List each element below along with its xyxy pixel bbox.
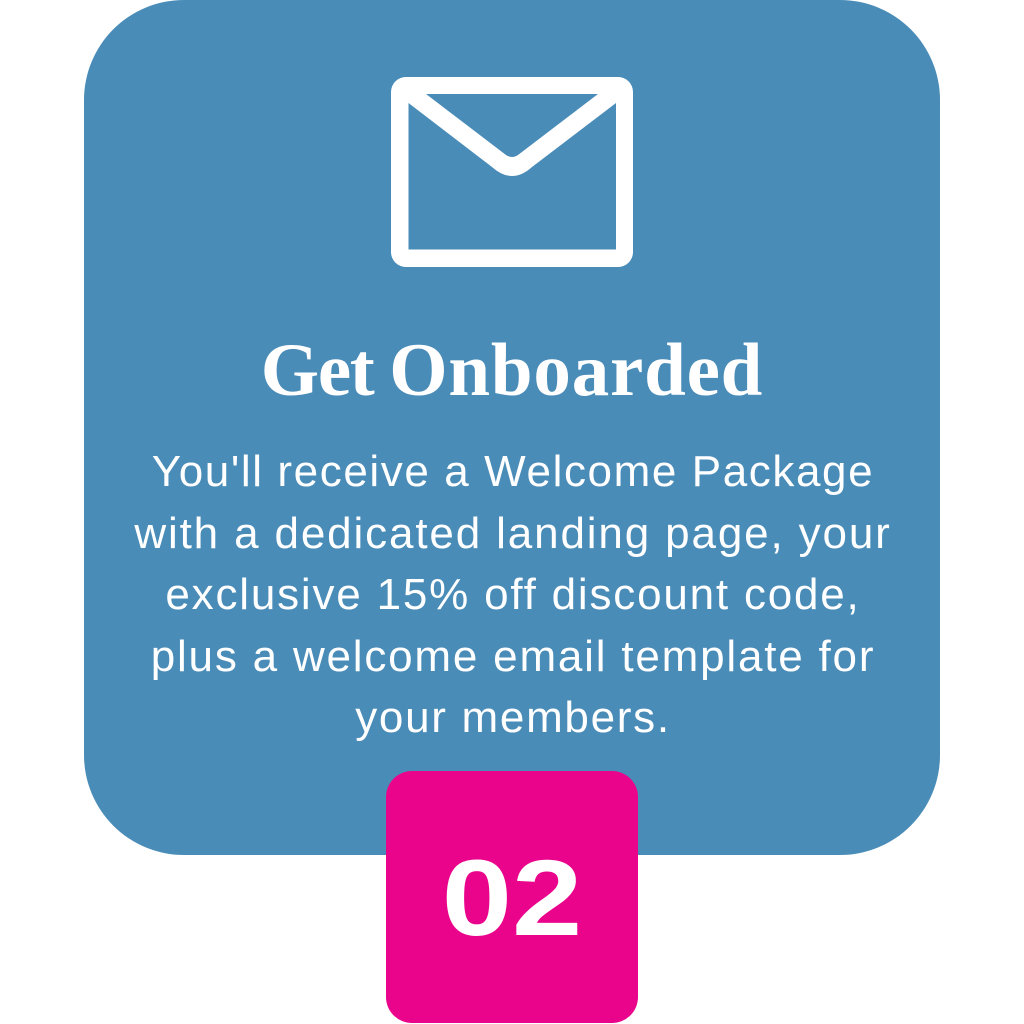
heading: Get Onboarded: Get Onboarded <box>261 329 763 412</box>
text block: description: You'll receive a Welcome Package <box>152 447 874 496</box>
badge: step number 02: 02 <box>442 837 582 958</box>
badge: step number 02 <box>386 771 638 1023</box>
text block: description: your members. <box>355 693 671 742</box>
text block: description: exclusive 15% off discount code, <box>165 570 861 619</box>
text block: description: with a dedicated landing page, your <box>134 508 892 558</box>
panel: blue card <box>84 0 940 855</box>
icon: envelope <box>391 77 633 267</box>
text block: description <box>134 447 892 742</box>
text block: description: plus a welcome email template for <box>151 632 875 680</box>
